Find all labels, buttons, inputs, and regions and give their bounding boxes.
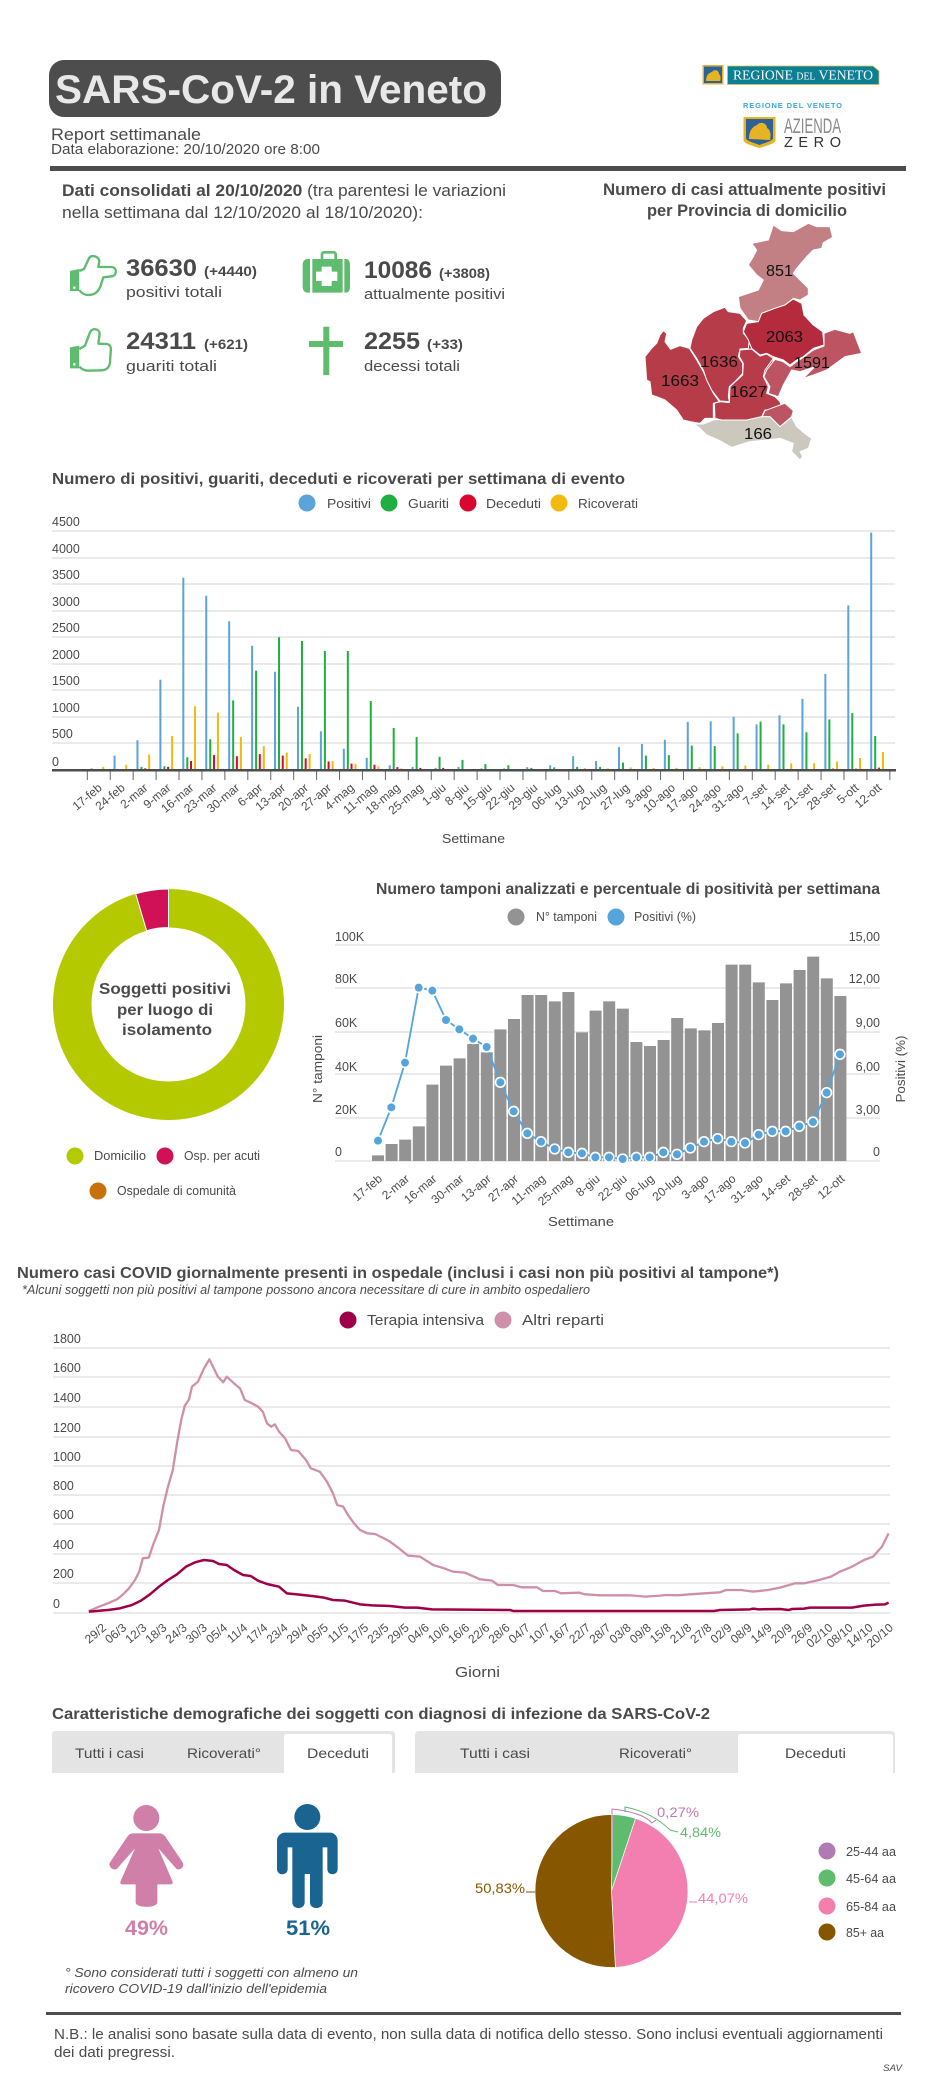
line chart: hospital occupancy: 14/10 <box>844 1620 876 1651</box>
line chart: hospital occupancy: 04/6 <box>405 1620 432 1646</box>
footnote: hospitalised: ricovero COVID-19 dall'inizio dell'epidemia <box>65 1981 327 1996</box>
combo chart: swabs and positivity: 17-ago <box>701 1171 739 1206</box>
stat: attualmente positivi <box>303 252 505 303</box>
tabs: sex panel: Tutti i casi <box>75 1745 144 1761</box>
bar chart: positives, recovered, deaths, hospitalised per week: 17-feb <box>70 780 105 813</box>
map: cases by province: 1663 <box>661 373 699 390</box>
combo chart: swabs and positivity: 6,00 <box>856 1060 880 1074</box>
stat: positivi totali: positivi totali <box>126 284 222 301</box>
bar chart: positives, recovered, deaths, hospitalised per week: 1000 <box>52 701 80 715</box>
stat: guariti totali: (+621) <box>204 337 248 352</box>
bar chart: positives, recovered, deaths, hospitalised per week: 22-giu <box>483 781 517 813</box>
bar chart: positives, recovered, deaths, hospitalised per week: 4-mag <box>322 781 357 813</box>
icon: thumb pointing right <box>70 256 116 295</box>
combo chart: swabs and positivity: 40K <box>335 1060 358 1074</box>
donut chart: isolation place <box>72 889 265 1101</box>
bar chart: positives, recovered, deaths, hospitalised per week: 12-ott <box>852 780 885 811</box>
pie chart: age groups <box>475 1804 748 1968</box>
combo chart: swabs and positivity: 30-mar <box>428 1172 467 1207</box>
heading: hospital chart <box>17 1265 779 1297</box>
line chart: hospital occupancy: 800 <box>53 1479 74 1493</box>
line chart: hospital occupancy: 15/8 <box>647 1620 674 1646</box>
combo chart: swabs and positivity: 3,00 <box>856 1103 880 1117</box>
bar chart: positives, recovered, deaths, hospitalised per week: 10-ago <box>640 780 678 815</box>
line chart: hospital occupancy: 12/3 <box>122 1620 150 1646</box>
intro text <box>62 181 506 222</box>
line chart: hospital occupancy: 11/4 <box>224 1620 250 1646</box>
combo chart: swabs and positivity: 80K <box>335 972 358 986</box>
stat: decessi totali: 2255 <box>364 328 420 355</box>
line chart: hospital occupancy: 22/6 <box>465 1620 493 1646</box>
legend: weekly events chart: Ricoverati <box>578 497 638 511</box>
legend: hospital chart: Altri reparti <box>522 1312 604 1329</box>
line chart: hospital occupancy: 16/7 <box>546 1620 573 1646</box>
line chart: hospital occupancy: 29/4 <box>284 1620 311 1646</box>
combo chart: swabs and positivity: 22-giu <box>595 1172 630 1204</box>
legend: weekly events chart: Guariti <box>408 497 449 511</box>
bar chart: positives, recovered, deaths, hospitalised per week: 06-lug <box>529 781 563 813</box>
line chart: hospital occupancy: 14/9 <box>748 1620 775 1646</box>
stat: attualmente positivi: attualmente positivi <box>364 286 505 303</box>
legend: donut chart: Domicilio <box>94 1148 146 1163</box>
combo chart: swabs and positivity: 20-lug <box>650 1172 684 1204</box>
line chart: hospital occupancy: 28/7 <box>587 1620 614 1646</box>
combo chart: swabs and positivity: 0 <box>873 1145 880 1159</box>
bar chart: positives, recovered, deaths, hospitalised per week: 28-set <box>804 780 839 813</box>
footer note <box>54 2027 883 2061</box>
bar chart: positives, recovered, deaths, hospitalised per week: 8-giu <box>442 781 472 808</box>
line chart: hospital occupancy: 600 <box>53 1508 74 1522</box>
stat: decessi totali: decessi totali <box>364 358 460 375</box>
bar chart: positives, recovered, deaths, hospitalised per week: 27-lug <box>598 781 632 813</box>
map: cases by province: 166 <box>744 426 772 443</box>
report subtitle: Report settimanale <box>51 126 201 144</box>
combo chart: swabs and positivity: 100K <box>335 930 365 944</box>
bar chart: positives, recovered, deaths, hospitalised per week: 25-mag <box>386 781 426 817</box>
line chart: hospital occupancy: 22/7 <box>566 1620 593 1646</box>
line chart: hospital occupancy: 1800 <box>53 1332 81 1346</box>
logo: Azienda Zero: AZIENDA <box>784 115 841 138</box>
tabs: age panel: Tutti i casi <box>460 1745 530 1761</box>
icon: first aid kit <box>303 252 350 293</box>
legend: donut chart: Ospedale di comunità <box>117 1183 237 1198</box>
line chart: hospital occupancy: 08/10 <box>824 1620 856 1651</box>
bar chart: positives, recovered, deaths, hospitalised per week: 13-apr <box>253 781 288 814</box>
bar chart: positives, recovered, deaths, hospitalised per week: 24-feb <box>93 780 128 813</box>
bar chart: positives, recovered, deaths, hospitalised per week: 3000 <box>52 595 80 609</box>
line chart: hospital occupancy: 02/9 <box>708 1620 735 1646</box>
tabs: age panel: Ricoverati° <box>619 1745 692 1761</box>
legend: age groups: 45-64 aa <box>846 1871 897 1886</box>
bar chart: positives, recovered, deaths, hospitalised per week: 9-mar <box>141 781 174 811</box>
map: cases by province: 1591 <box>794 355 830 372</box>
tabs: sex panel <box>52 1731 395 1773</box>
bar chart: positives, recovered, deaths, hospitalised per week: 7-set <box>740 780 770 808</box>
legend: weekly events chart: Deceduti <box>486 497 541 511</box>
line chart: hospital occupancy: 20/9 <box>768 1620 795 1646</box>
bar chart: positives, recovered, deaths, hospitalised per week: 6-apr <box>235 781 265 809</box>
bar chart: positives, recovered, deaths, hospitalised per week: 2-mar <box>118 781 151 811</box>
combo chart: swabs and positivity: 2-mar <box>379 1172 412 1202</box>
line chart: hospital occupancy: 04/7 <box>506 1620 533 1646</box>
line chart: hospital occupancy: 05/5 <box>304 1620 331 1646</box>
legend: weekly events chart <box>298 494 638 512</box>
stat: guariti totali: guariti totali <box>126 358 217 375</box>
logo: Azienda Zero <box>743 101 842 151</box>
legend: age groups: 25-44 aa <box>846 1844 897 1859</box>
footnote: hospitalised <box>65 1965 358 1996</box>
legend: hospital chart: Terapia intensiva <box>367 1312 485 1329</box>
stat: positivi totali: 36630 <box>126 255 197 282</box>
line chart: hospital occupancy: 21/8 <box>667 1620 694 1646</box>
line chart: hospital occupancy: 30/3 <box>183 1620 210 1646</box>
line chart: hospital occupancy: 27/8 <box>687 1620 715 1646</box>
donut chart: isolation place: isolamento <box>122 1022 212 1039</box>
combo chart: swabs and positivity: 15,00 <box>849 930 880 944</box>
legend: hospital chart <box>340 1312 604 1329</box>
stat: guariti totali: 24311 <box>126 328 196 355</box>
bar chart: positives, recovered, deaths, hospitalised per week: 11-mag <box>340 781 380 817</box>
combo chart: swabs and positivity: N° tamponi <box>310 1035 325 1103</box>
combo chart: swabs and positivity: 17-feb <box>350 1171 385 1204</box>
line chart: hospital occupancy: 09/8 <box>627 1620 654 1646</box>
bar chart: positives, recovered, deaths, hospitalised per week: 2500 <box>52 621 80 635</box>
line chart: hospital occupancy: 28/6 <box>486 1620 513 1646</box>
bar chart: positives, recovered, deaths, hospitalised per week: 20-lug <box>575 781 609 813</box>
stat: decessi totali: (+33) <box>427 337 463 352</box>
combo chart: swabs and positivity: 06-lug <box>622 1172 657 1204</box>
bar chart: positives, recovered, deaths, hospitalised per week: 18-mag <box>363 781 403 817</box>
map: cases by province: 851 <box>766 263 793 280</box>
bar chart: positives, recovered, deaths, hospitalised per week: 20-apr <box>275 781 311 814</box>
combo chart: swabs and positivity: 0 <box>335 1145 342 1159</box>
combo chart: swabs and positivity: 12,00 <box>849 972 880 986</box>
donut chart: isolation place: per luogo di <box>117 1002 213 1019</box>
legend: donut chart <box>66 1148 260 1200</box>
combo chart: swabs and positivity <box>310 930 908 1229</box>
pie chart: age groups: 4,84% <box>680 1824 721 1840</box>
stat: positivi totali <box>70 255 257 301</box>
heading: demographics: Caratteristiche demografiche dei soggetti con diagnosi di infezione da SARS-CoV-2 <box>52 1706 710 1723</box>
icon: thumb up <box>70 329 111 371</box>
bar chart: positives, recovered, deaths, hospitalised per week: 16-mar <box>158 781 196 816</box>
bar chart: positives, recovered, deaths, hospitalised per week: 30-mar <box>204 781 242 816</box>
bar chart: positives, recovered, deaths, hospitalised per week: 15-giu <box>460 781 495 813</box>
line chart: hospital occupancy: Giorni <box>455 1665 500 1681</box>
logo: Azienda Zero: ZERO <box>784 135 841 151</box>
bar chart: positives, recovered, deaths, hospitalised per week: 23-mar <box>181 781 219 816</box>
title banner: SARS-CoV-2 in Veneto <box>55 68 487 112</box>
legend: age groups: 85+ aa <box>846 1925 885 1940</box>
line chart: hospital occupancy: 1400 <box>53 1391 81 1405</box>
line chart: hospital occupancy: 23/5 <box>365 1620 392 1646</box>
map heading: per Provincia di domicilio <box>647 202 847 220</box>
tabs: age panel: Deceduti <box>785 1745 846 1761</box>
logo: Regione del Veneto: REGIONE DEL VENETO <box>733 68 873 84</box>
map: cases by province <box>645 223 862 460</box>
legend: donut chart: Osp. per acuti <box>184 1148 260 1163</box>
bar chart: positives, recovered, deaths, hospitalised per week: 24-ago <box>686 780 724 815</box>
bar chart: positives, recovered, deaths, hospitalised per week: 0 <box>52 755 59 769</box>
bar chart: positives, recovered, deaths, hospitalised per week: 4500 <box>52 515 80 529</box>
line chart: hospital occupancy: 26/9 <box>788 1620 815 1646</box>
icon: female figure <box>109 1805 183 1907</box>
combo chart: swabs and positivity: 28-set <box>786 1171 821 1204</box>
logo: Regione del Veneto <box>702 65 879 84</box>
combo chart: swabs and positivity: 3-ago <box>679 1171 712 1202</box>
heading: hospital chart: *Alcuni soggetti non più positivi al tampone possono ancora necessitare di cure in ambito ospedaliero <box>22 1283 590 1297</box>
heading: swabs chart: Numero tamponi analizzati e percentuale di positività per settimana <box>376 881 880 898</box>
heading: hospital chart: Numero casi COVID giornalmente presenti in ospedale (inclusi i casi non più positivi al tampone*) <box>17 1265 779 1282</box>
combo chart: swabs and positivity: 27-apr <box>485 1172 521 1205</box>
legend: age groups: 65-84 aa <box>846 1899 897 1914</box>
combo chart: swabs and positivity: 8-giu <box>573 1172 603 1199</box>
line chart: hospital occupancy: 1200 <box>53 1421 81 1435</box>
map: cases by province: 2063 <box>766 329 803 346</box>
stat: attualmente positivi: (+3808) <box>439 266 490 281</box>
bar chart: positives, recovered, deaths, hospitalised per week: 4000 <box>52 542 80 556</box>
pie chart: age groups: 50,83% <box>475 1880 525 1896</box>
bar chart: positives, recovered, deaths, hospitalised per week: 3-ago <box>623 780 655 811</box>
legend: weekly events chart: Positivi <box>327 497 371 511</box>
signature: SAV <box>883 2063 904 2074</box>
line chart: hospital occupancy: 06/3 <box>102 1620 129 1646</box>
footnote: hospitalised: ° Sono considerati tutti i soggetti con almeno un <box>65 1965 358 1980</box>
logo: Azienda Zero: REGIONE DEL VENETO <box>743 101 842 110</box>
bar chart: positives, recovered, deaths, hospitalised per week: 3500 <box>52 568 80 582</box>
bar chart: positives, recovered, deaths, hospitalised per week: Settimane <box>442 832 505 846</box>
line chart: hospital occupancy: 20/10 <box>864 1620 896 1651</box>
bar chart: positives, recovered, deaths, hospitalised per week: 14-set <box>758 780 793 813</box>
sex percentages: 51% <box>286 1917 330 1940</box>
map: cases by province: 1627 <box>730 384 767 401</box>
line chart: hospital occupancy: 08/9 <box>728 1620 755 1646</box>
combo chart: swabs and positivity: Positivi (%) <box>893 1036 908 1102</box>
line chart: hospital occupancy <box>53 1332 896 1681</box>
line chart: hospital occupancy: 29/2 <box>82 1620 109 1646</box>
combo chart: swabs and positivity: 25-mag <box>535 1172 575 1208</box>
tabs: sex panel: Ricoverati° <box>187 1745 261 1761</box>
bar chart: positives, recovered, deaths, hospitalised per week: 29-giu <box>506 781 540 813</box>
intro text: Dati consolidati al 20/10/2020 (tra parentesi le variazioni <box>62 181 506 200</box>
legend: swabs chart: N° tamponi <box>536 910 597 924</box>
line chart: hospital occupancy: 03/8 <box>607 1620 634 1646</box>
line chart: hospital occupancy: 0 <box>53 1597 60 1611</box>
bar chart: positives, recovered, deaths, hospitalised per week: 1-giu <box>419 781 449 808</box>
line chart: hospital occupancy: 18/3 <box>143 1620 170 1646</box>
icon: cross <box>309 327 343 375</box>
footer rule <box>46 2012 901 2015</box>
combo chart: swabs and positivity: 16-mar <box>401 1172 439 1207</box>
report subtitle <box>51 126 320 158</box>
line chart: hospital occupancy: 29/5 <box>385 1620 412 1646</box>
stat: guariti totali <box>70 328 248 375</box>
combo chart: swabs and positivity: Settimane <box>548 1214 614 1229</box>
line chart: hospital occupancy: 16/6 <box>445 1620 472 1646</box>
stat: decessi totali <box>309 327 463 375</box>
map heading <box>603 181 886 220</box>
tabs: age panel <box>415 1731 895 1773</box>
pie chart: age groups: 0,27% <box>657 1804 699 1820</box>
line chart: hospital occupancy: 23/4 <box>264 1620 291 1646</box>
line chart: hospital occupancy: 02/10 <box>803 1620 836 1651</box>
line chart: hospital occupancy: 10/7 <box>526 1620 553 1646</box>
combo chart: swabs and positivity: 12-ott <box>815 1171 848 1202</box>
bar chart: positives, recovered, deaths, hospitalised per week: 21-set <box>781 780 816 813</box>
sex percentages <box>125 1917 330 1940</box>
line chart: hospital occupancy: 24/3 <box>163 1620 190 1646</box>
line chart: hospital occupancy: 400 <box>53 1538 74 1552</box>
combo chart: swabs and positivity: 31-ago <box>728 1171 766 1206</box>
combo chart: swabs and positivity: 9,00 <box>856 1016 880 1030</box>
bar chart: positives, recovered, deaths, hospitalised per week: 27-apr <box>298 781 334 814</box>
heading: weekly events chart: Numero di positivi, guariti, deceduti e ricoverati per settimana di evento <box>52 471 625 488</box>
combo chart: swabs and positivity: 60K <box>335 1016 358 1030</box>
legend: age groups <box>818 1842 897 1940</box>
report subtitle: Data elaborazione: 20/10/2020 ore 8:00 <box>51 141 320 158</box>
pie chart: age groups: 44,07% <box>698 1890 748 1906</box>
line chart: hospital occupancy: 05/4 <box>203 1620 230 1646</box>
combo chart: swabs and positivity: 14-set <box>758 1171 793 1204</box>
map heading: Numero di casi attualmente positivi <box>603 181 886 199</box>
line chart: hospital occupancy: 11/5 <box>325 1620 351 1646</box>
line chart: hospital occupancy: 17/4 <box>243 1620 271 1646</box>
donut chart: isolation place: Soggetti positivi <box>99 981 231 998</box>
line chart: hospital occupancy: 10/6 <box>425 1620 452 1646</box>
intro text: nella settimana dal 12/10/2020 al 18/10/2020): <box>62 203 423 222</box>
bar chart: positives, recovered, deaths, hospitalised per week: 31-ago <box>709 780 747 815</box>
stat: attualmente positivi: 10086 <box>364 257 432 284</box>
bar chart: positives, recovered, deaths, hospitalised per week: 17-ago <box>663 780 701 815</box>
line chart: hospital occupancy: 200 <box>53 1567 74 1581</box>
stat: positivi totali: (+4440) <box>204 264 257 279</box>
legend: swabs chart <box>508 908 696 926</box>
legend: swabs chart: Positivi (%) <box>634 910 696 924</box>
sex percentages: 49% <box>125 1917 168 1940</box>
bar chart: positives, recovered, deaths, hospitalised per week: 13-lug <box>552 781 586 813</box>
line chart: hospital occupancy: 1000 <box>53 1450 81 1464</box>
bar chart: positives, recovered, deaths, hospitalised per week: 2000 <box>52 648 80 662</box>
combo chart: swabs and positivity: 11-mag <box>509 1172 548 1208</box>
tabs: sex panel: Deceduti <box>307 1745 369 1761</box>
line chart: hospital occupancy: 17/5 <box>344 1620 371 1646</box>
combo chart: swabs and positivity: 20K <box>335 1103 358 1117</box>
footer note: N.B.: le analisi sono basate sulla data di evento, non sulla data di notifica dello stesso. Sono inclusi eventuali aggiornamenti <box>54 2027 883 2043</box>
bar chart: positives, recovered, deaths, hospitalised per week: 1500 <box>52 674 80 688</box>
header rule <box>50 166 906 171</box>
bar chart: positives, recovered, deaths, hospitalised per week: 500 <box>52 727 73 741</box>
map: cases by province: 1636 <box>700 354 738 371</box>
bar chart: positives, recovered, deaths, hospitalised per week <box>52 515 896 846</box>
combo chart: swabs and positivity: 13-apr <box>458 1172 494 1205</box>
bar chart: positives, recovered, deaths, hospitalised per week: 5-ott <box>834 780 862 807</box>
line chart: hospital occupancy: 1600 <box>53 1361 81 1375</box>
icon: male figure <box>277 1804 338 1908</box>
footer note: dei dati pregressi. <box>54 2045 175 2061</box>
